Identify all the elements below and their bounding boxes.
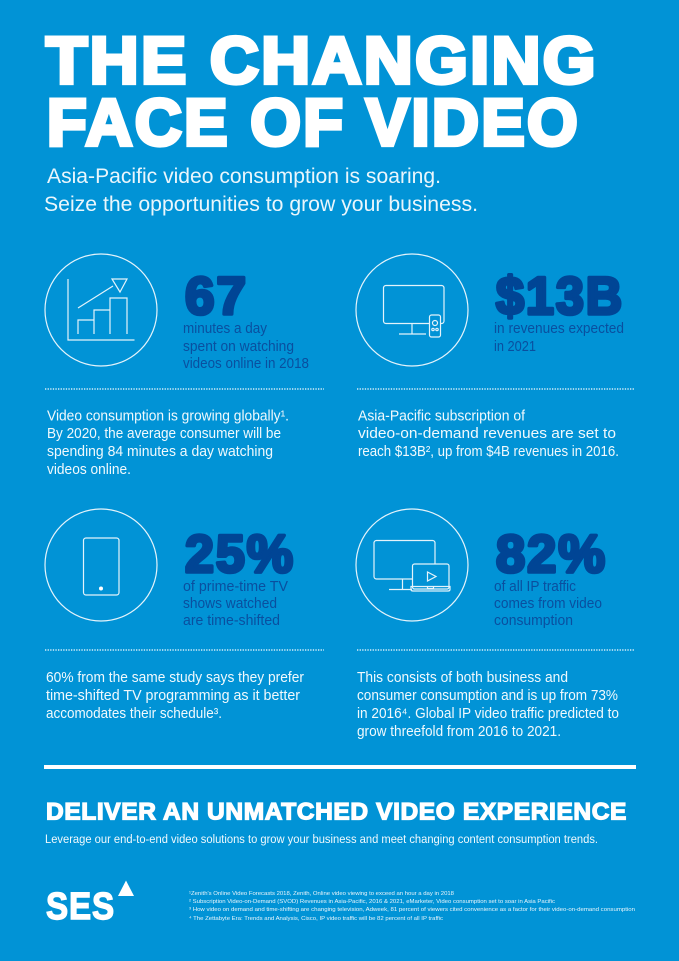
stat: 67: 67 — [185, 267, 248, 326]
panel: 25% time-shifted — [45, 509, 324, 722]
body text — [47, 408, 289, 478]
subtitle: Asia-Pacific video consumption is soaring. — [47, 164, 441, 188]
title: THE CHANGING — [46, 23, 598, 97]
subtitle — [44, 164, 478, 216]
footnotes: ² Subscription Video-on-Demand (SVOD) Revenues in Asia-Pacific, 2016 & 2021, eMarketer, Video consumption set to soar in Asia Pacific — [189, 899, 555, 905]
body text: Video consumption is growing globally¹. — [47, 408, 289, 424]
body text: accomodates their schedule³. — [46, 706, 222, 722]
stat caption: are time-shifted — [183, 612, 280, 629]
body text: reach $13B², up from $4B revenues in 2016. — [358, 444, 619, 460]
panel: 82% IP traffic — [356, 509, 635, 740]
footnotes: ⁴ The Zettabyte Era: Trends and Analysis, Cisco, IP video traffic will be 82 percent of all IP traffic — [189, 916, 443, 922]
body text: Asia-Pacific subscription of — [358, 408, 526, 424]
subtitle: Seize the opportunities to grow your business. — [44, 192, 478, 216]
body text — [46, 670, 304, 722]
body text: This consists of both business and — [357, 670, 568, 686]
body text — [357, 670, 619, 740]
stat: 82%: 82% — [496, 525, 607, 584]
stat caption: in 2021 — [494, 338, 536, 355]
body text: videos online. — [47, 462, 131, 478]
panel: $13B revenues — [356, 254, 635, 460]
stat caption: in revenues expected — [494, 320, 624, 337]
body text: video-on-demand revenues are set to — [358, 426, 616, 442]
stat caption: minutes a day — [183, 320, 267, 337]
body text: spending 84 minutes a day watching — [47, 444, 273, 460]
body text: time-shifted TV programming as it better — [46, 688, 300, 704]
icon: monitor and laptop — [356, 509, 468, 621]
body text: grow threefold from 2016 to 2021. — [357, 724, 561, 740]
body text: consumer consumption and is up from 73% — [357, 688, 618, 704]
stat caption — [183, 320, 309, 372]
stat caption: consumption — [494, 612, 573, 629]
stat caption — [183, 578, 288, 629]
panel: 67 minutes a day — [45, 254, 324, 478]
logo: SES: SES — [46, 886, 115, 928]
stat: $13B: $13B — [496, 267, 624, 326]
footnotes — [189, 891, 635, 922]
footnotes: ¹Zenith's Online Video Forecasts 2018, Zenith, Online video viewing to exceed an hour a day in 2018 — [189, 891, 454, 897]
stat caption: of prime-time TV — [183, 578, 288, 595]
stat caption: shows watched — [183, 595, 277, 612]
stat caption — [494, 578, 602, 629]
stat caption: videos online in 2018 — [183, 355, 309, 372]
icon: tablet — [45, 509, 157, 621]
stat caption — [494, 320, 624, 355]
title — [46, 23, 598, 159]
icon: growth chart — [45, 254, 157, 366]
stat: 25%: 25% — [185, 525, 295, 584]
call to action text: Leverage our end-to-end video solutions to grow your business and meet changing content consumption trends. — [45, 832, 598, 846]
footnotes: ³ How video on demand and time-shifting are changing television, Adweek, 81 percent of viewers cited convenience as a factor for their video-on-demand consumption — [189, 907, 635, 913]
icon: tv and remote — [356, 254, 468, 366]
title: FACE OF VIDEO — [47, 85, 580, 159]
stat caption: of all IP traffic — [494, 578, 576, 595]
call to action heading: DELIVER AN UNMATCHED VIDEO EXPERIENCE — [46, 798, 627, 826]
stat caption: comes from video — [494, 595, 602, 612]
body text: By 2020, the average consumer will be — [47, 426, 281, 442]
body text: 60% from the same study says they prefer — [46, 670, 304, 686]
stat caption: spent on watching — [183, 338, 294, 355]
body text: in 2016⁴. Global IP video traffic predicted to — [357, 706, 619, 722]
body text — [358, 408, 619, 460]
